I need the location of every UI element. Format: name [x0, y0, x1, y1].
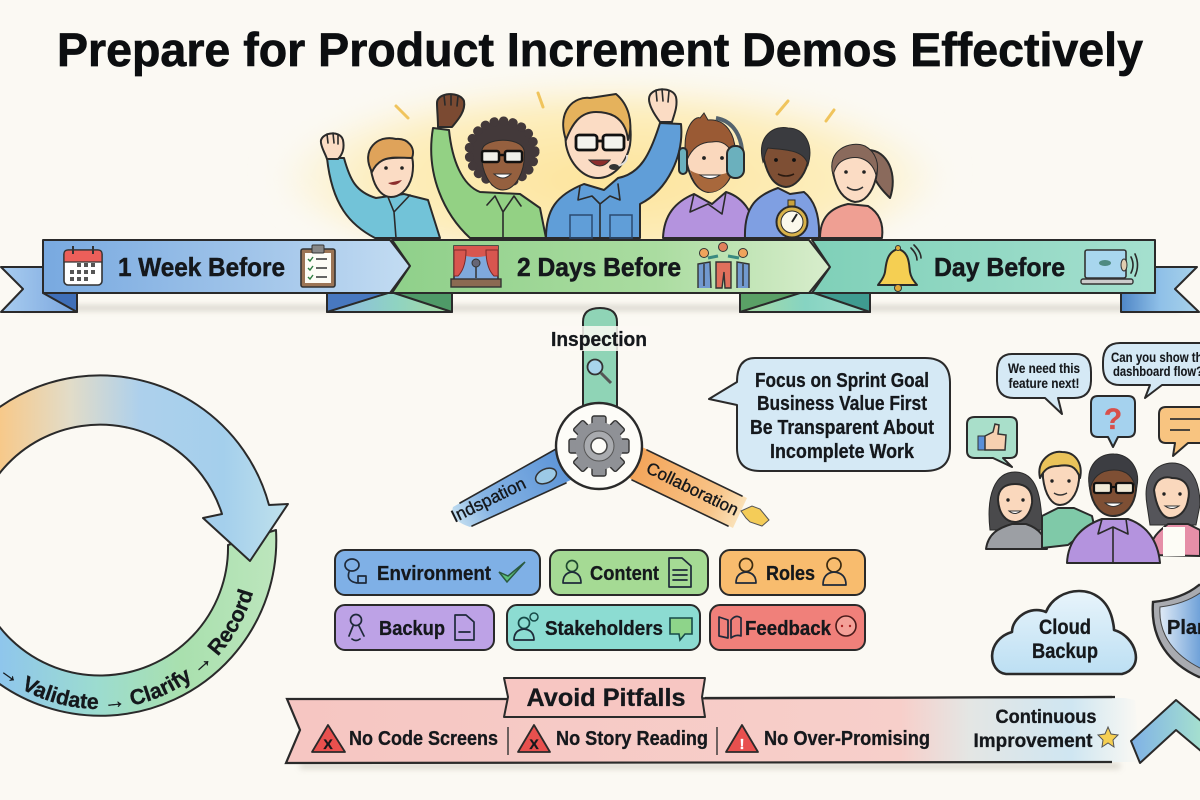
icon: laptop — [1081, 250, 1138, 284]
pitfall: over-promising: ! — [740, 736, 744, 753]
person 4 — [663, 113, 756, 238]
person a — [986, 472, 1047, 549]
pitfall: code screens: X — [323, 736, 333, 752]
segment: 1 week before — [43, 240, 410, 293]
chip: stakeholders — [507, 605, 700, 650]
tips text — [750, 370, 934, 463]
icon: team huddle — [698, 242, 749, 288]
pitfall: code screens: No Code Screens — [349, 728, 498, 750]
lower arc — [0, 530, 276, 716]
icon: question — [1091, 396, 1135, 447]
tips text: Be Transparent About — [750, 417, 934, 439]
label: adaptation: Indspation — [448, 473, 529, 526]
icon: question: ? — [1104, 403, 1122, 436]
tips text: Incomplete Work — [770, 441, 915, 463]
upper arc with arrowhead — [0, 375, 288, 561]
icon: handshake — [741, 506, 769, 526]
label: Day Before — [934, 252, 1065, 282]
person 1 — [321, 133, 440, 238]
chip: stakeholders: Stakeholders — [545, 618, 663, 640]
chip: content: Content — [590, 563, 659, 585]
bubble: feature request: feature next! — [1008, 375, 1080, 391]
label: 2 Days Before — [517, 252, 681, 282]
arm: inspection — [583, 308, 617, 410]
chevron — [1131, 700, 1200, 763]
scrum pillars hub — [448, 308, 769, 528]
arc labels — [0, 585, 255, 709]
loop arrow — [0, 374, 289, 717]
person 3 — [546, 89, 681, 238]
heading tag: Avoid Pitfalls — [526, 684, 686, 712]
pitfall: story reading: X — [529, 736, 539, 752]
chip: roles — [720, 550, 865, 595]
chip: content — [550, 550, 708, 595]
left tail — [1, 267, 77, 312]
cloud backup — [992, 591, 1136, 674]
label background — [550, 326, 650, 351]
banner shadow — [300, 763, 1120, 769]
speech bubble: tips — [709, 358, 950, 471]
pitfall: over-promising: No Over-Promising — [764, 728, 930, 750]
tips text: Focus on Sprint Goal — [755, 370, 929, 392]
bubble: feature request: We need this — [1008, 360, 1080, 376]
bubble: feature request — [997, 354, 1091, 414]
tips text: Business Value First — [757, 393, 927, 415]
sun glow — [275, 70, 945, 270]
icon: theatre stage — [451, 246, 501, 287]
person 5 — [745, 127, 819, 238]
label: collaboration: Collaboration — [643, 459, 742, 520]
hub with gear — [556, 403, 642, 489]
cloud backup: Cloud — [1039, 616, 1091, 639]
icon: magnifier — [588, 360, 611, 383]
pitfall: story reading — [518, 725, 708, 752]
fold 2 — [740, 293, 870, 312]
segment: day before — [812, 240, 1155, 293]
pitfall: story reading: No Story Reading — [556, 728, 708, 750]
heading tag — [504, 678, 705, 717]
chip: backup — [335, 605, 494, 650]
audience feedback group — [967, 343, 1200, 563]
icon: chat card — [1159, 407, 1200, 456]
pitfall: over-promising — [726, 725, 930, 753]
person c — [1067, 454, 1160, 563]
timeline ribbon — [1, 240, 1199, 312]
arm: adaptation — [452, 446, 575, 527]
icon: bell — [878, 245, 921, 292]
person 2 — [431, 94, 546, 238]
loop arrow: → Validate → Clarify → Record — [3, 588, 253, 710]
hero: cheering team — [275, 70, 945, 270]
person b — [1039, 452, 1094, 548]
sparkle marks — [396, 93, 834, 121]
chip: feedback: Feedback — [745, 618, 832, 640]
person 6 — [820, 144, 893, 238]
segment: 2 days before — [392, 240, 830, 293]
arm: collaboration — [625, 446, 747, 528]
chip: environment — [335, 550, 540, 595]
chip: feedback — [710, 605, 865, 650]
icon: thumbs up — [967, 417, 1017, 467]
fold 1 — [327, 293, 452, 312]
shield: plan — [1153, 585, 1200, 677]
pitfall: code screens — [312, 725, 498, 752]
chip: backup: Backup — [379, 618, 445, 640]
person d — [1146, 463, 1200, 556]
right tail — [1121, 267, 1199, 312]
cloud backup: Backup — [1032, 640, 1098, 663]
title: Prepare for Product Increment Demos Effectively — [57, 23, 1143, 76]
ribbon shadow — [20, 305, 1180, 311]
icon: star — [1098, 727, 1118, 747]
bubble: dashboard question — [1103, 343, 1200, 398]
icon: clipboard — [301, 245, 335, 287]
checklist chips — [335, 550, 865, 650]
icon: bubble — [533, 465, 559, 487]
chip: roles: Roles — [766, 563, 815, 585]
label: inspection: Inspection — [551, 329, 647, 351]
continuous improvement: Improvement — [974, 731, 1093, 752]
banner body — [286, 698, 1140, 762]
icon: calendar — [64, 246, 102, 285]
chip: environment: Environment — [377, 563, 491, 585]
pitfalls banner — [286, 678, 1140, 769]
continuous improvement — [974, 700, 1200, 763]
label: 1 Week Before — [118, 252, 285, 282]
continuous improvement: Continuous — [996, 707, 1096, 728]
icon: stopwatch — [776, 200, 808, 238]
